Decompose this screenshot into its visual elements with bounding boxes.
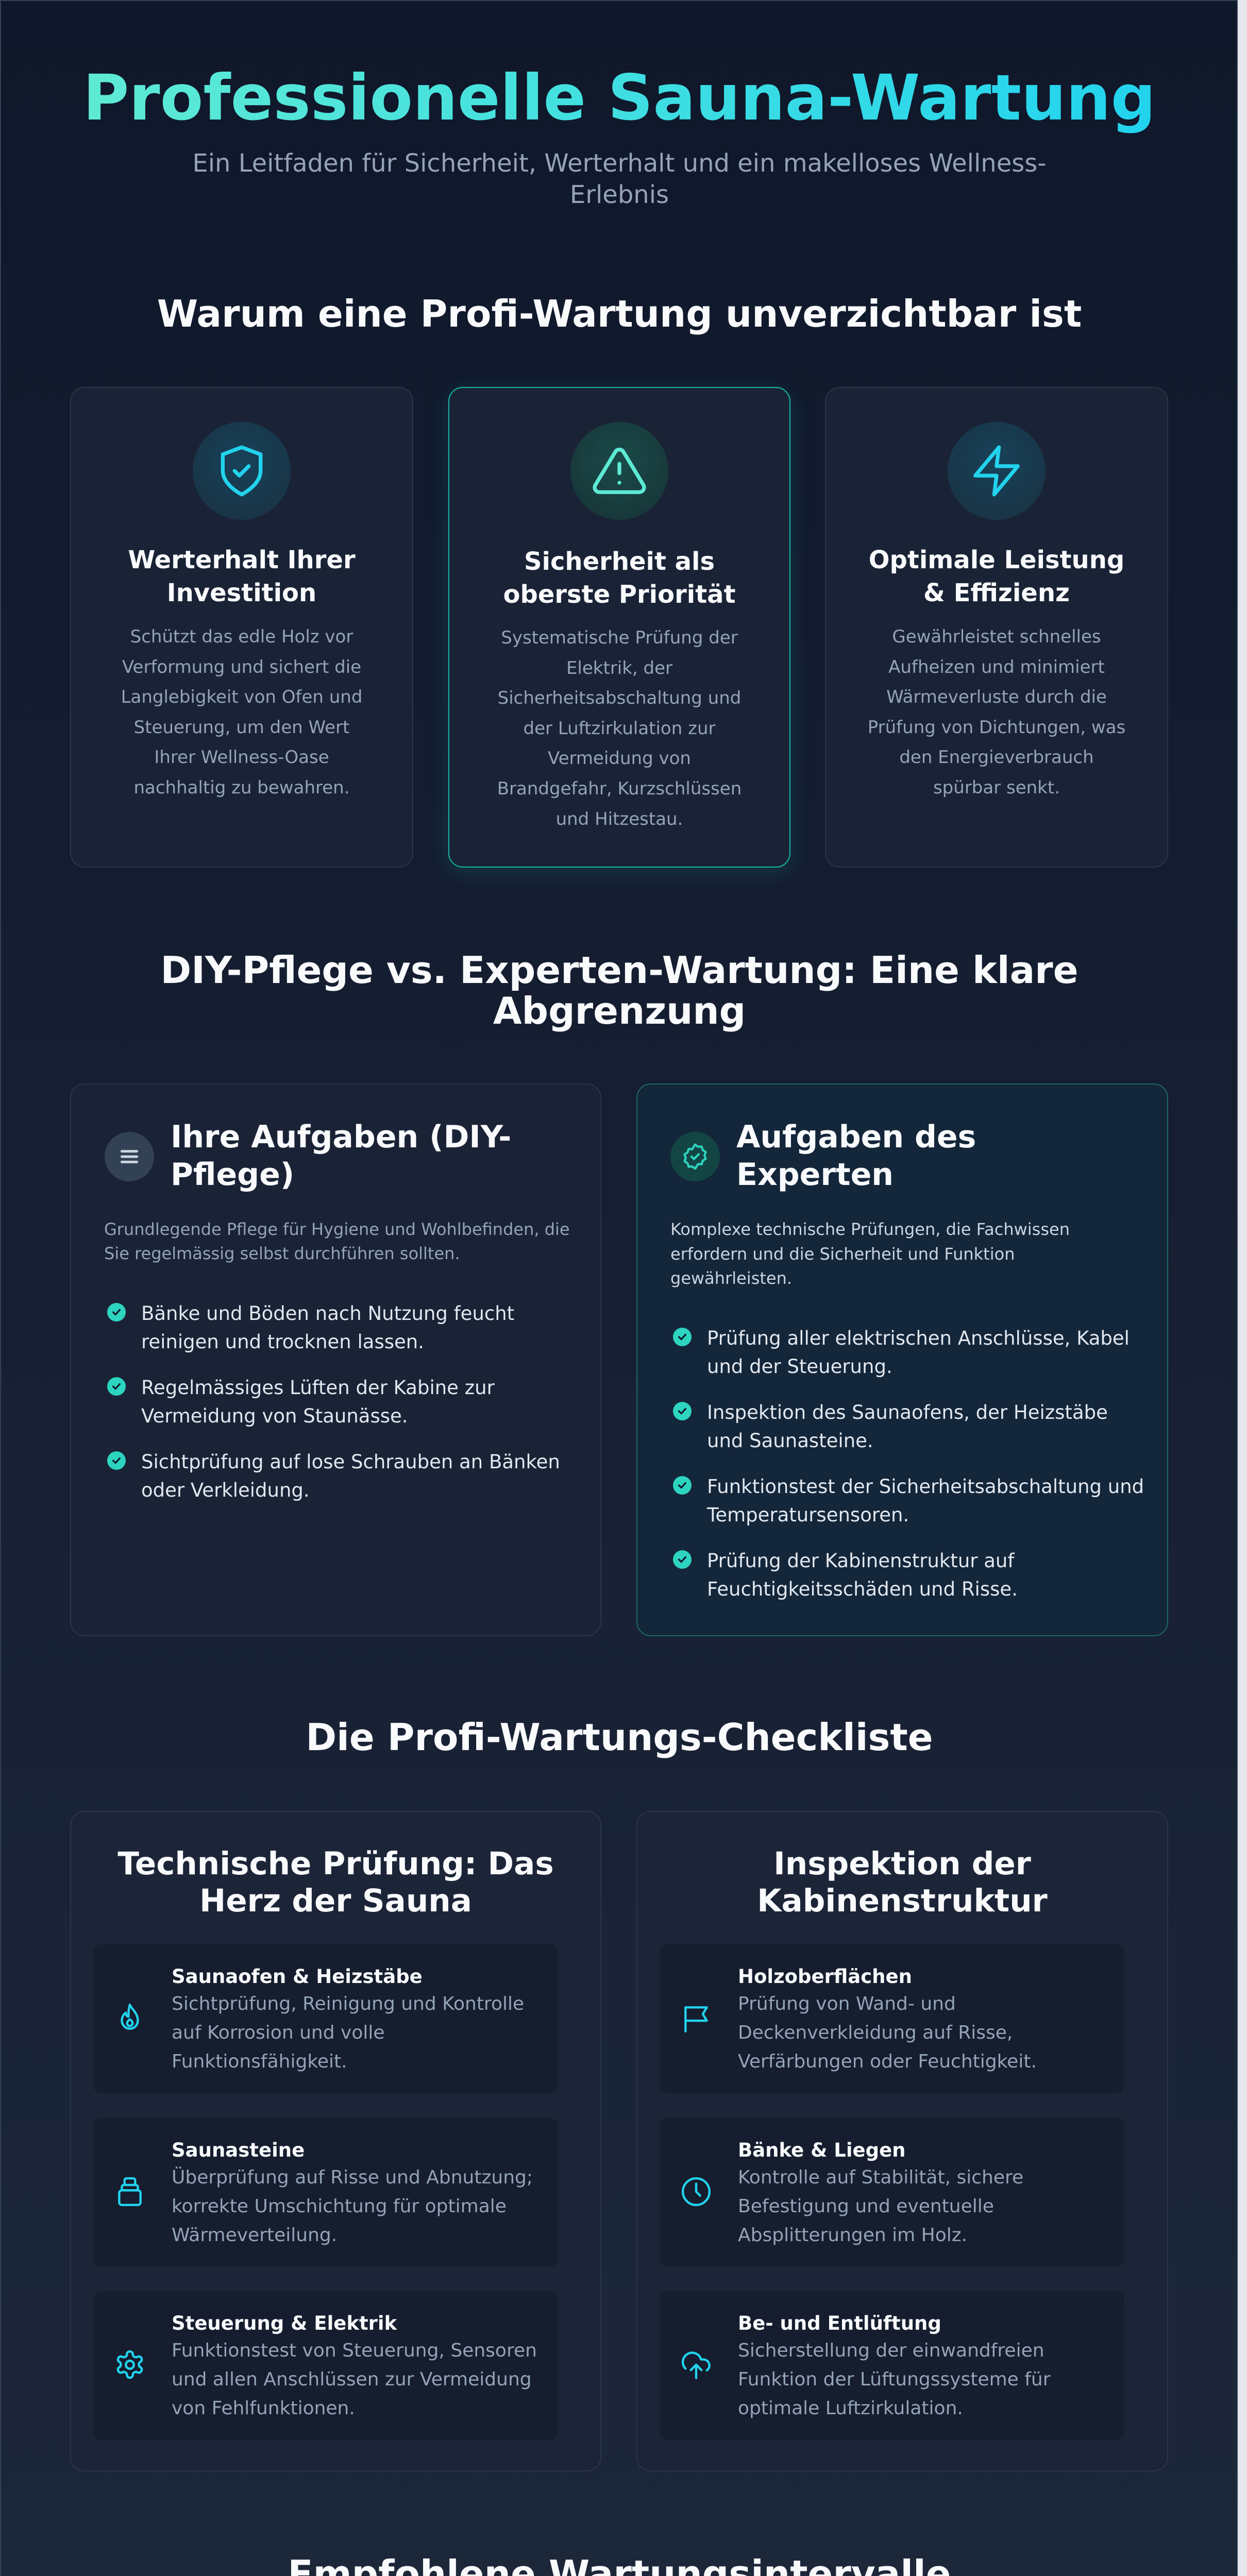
card text: den Energieverbrauch <box>899 747 1094 768</box>
heading: DIY vs Experten <box>160 948 1079 1032</box>
card title <box>128 546 356 607</box>
panel title: Experten <box>736 1157 894 1193</box>
item: Holzoberflächen: Prüfung von Wand- und <box>738 1993 956 2014</box>
card text: Systematische Prüfung der <box>501 628 738 648</box>
card text: spürbar senkt. <box>933 777 1060 798</box>
card title: & Effizienz <box>923 579 1070 607</box>
item: Bänke: Bänke & Liegen <box>738 2139 906 2161</box>
title: Professionelle Sauna-Wartung <box>83 61 1156 134</box>
item: Saunaofen: Funktionsfähigkeit. <box>172 2051 347 2072</box>
card title: Werterhalt Ihrer <box>128 546 356 574</box>
card text: Steuerung, um den Wert <box>134 717 349 738</box>
heading: why: Warum eine Profi-Wartung unverzichtbar ist <box>157 292 1082 335</box>
card text: und Hitzestau. <box>556 809 683 829</box>
panel title <box>117 1845 554 1919</box>
item: Bänke: Kontrolle auf Stabilität, sichere <box>738 2167 1023 2188</box>
card text: Sicherheitsabschaltung und <box>498 688 741 708</box>
card text: Gewährleistet schnelles <box>892 626 1101 647</box>
panel: Leistung <box>825 387 1168 868</box>
item: Saunaofen: auf Korrosion und volle <box>172 2022 384 2043</box>
panel: Werterhalt <box>70 387 413 868</box>
item: Steuerung <box>93 2291 558 2440</box>
list: oder Verkleidung. <box>141 1479 310 1501</box>
list <box>673 1327 1144 1600</box>
card text: Elektrik, der <box>566 658 672 679</box>
item: Steuerung: und allen Anschlüssen zur Vermeidung <box>172 2369 532 2390</box>
item: Lüftung <box>660 2291 1124 2440</box>
item: Holzoberflächen: Verfärbungen oder Feuchtigkeit. <box>738 2051 1037 2072</box>
item: Holzoberflächen: Deckenverkleidung auf Risse, <box>738 2022 1013 2043</box>
panel title <box>736 1119 976 1193</box>
item: Saunasteine: korrekte Umschichtung für optimale <box>172 2196 507 2217</box>
card text: Wärmeverluste durch die <box>886 687 1107 707</box>
list: Bänke und Böden nach Nutzung feucht <box>141 1302 514 1325</box>
panel: Sicherheit <box>448 387 790 868</box>
card text: nachhaltig zu bewahren. <box>133 777 350 798</box>
list: Inspektion des Saunaofens, der Heizstäbe <box>707 1401 1108 1423</box>
card title: Sicherheit als <box>524 547 715 576</box>
item: Steuerung: Funktionstest von Steuerung, Sensoren <box>172 2340 537 2361</box>
item: Saunasteine: Saunasteine <box>172 2139 305 2161</box>
item: Bänke <box>660 2118 1124 2267</box>
panel title: Herz der Sauna <box>199 1883 472 1919</box>
item: Steuerung: von Fehlfunktionen. <box>172 2398 355 2419</box>
list: Sichtprüfung auf lose Schrauben an Bänken <box>141 1451 560 1473</box>
description: gewährleisten. <box>670 1268 792 1288</box>
panel title: Pflege) <box>171 1157 294 1193</box>
card text: der Luftzirkulation zur <box>524 718 715 739</box>
description: Grundlegende Pflege für Hygiene und Wohlbefinden, die <box>104 1219 570 1239</box>
list: Temperatursensoren. <box>707 1504 909 1526</box>
description: Sie regelmässig selbst durchführen sollten. <box>104 1244 460 1263</box>
list <box>107 1302 560 1501</box>
card text: Aufheizen und minimiert <box>888 657 1105 677</box>
card text <box>497 628 742 829</box>
card text: Prüfung von Dichtungen, was <box>868 717 1125 738</box>
card text: Langlebigkeit von Ofen und <box>121 687 362 707</box>
list: Prüfung der Kabinenstruktur auf <box>707 1550 1014 1572</box>
list: Prüfung aller elektrischen Anschlüsse, Kabel <box>707 1327 1130 1349</box>
icon: warning <box>570 422 668 520</box>
icon: shield <box>193 422 291 520</box>
item: Holzoberflächen: Holzoberflächen <box>738 1965 912 1988</box>
panel: Technische Prüfung <box>70 1811 601 2471</box>
description: erfordern und die Sicherheit und Funktion <box>670 1244 1015 1263</box>
card title: Optimale Leistung <box>869 546 1124 574</box>
list: und der Steuerung. <box>707 1355 892 1378</box>
panel title: Aufgaben des <box>736 1119 976 1155</box>
item: Steuerung: Steuerung & Elektrik <box>172 2312 397 2334</box>
card title <box>503 547 736 609</box>
icon: lightning <box>948 422 1046 520</box>
item: Saunaofen <box>93 1944 558 2093</box>
item: Saunaofen: Saunaofen & Heizstäbe <box>172 1965 423 1988</box>
item: Saunasteine: Wärmeverteilung. <box>172 2225 337 2246</box>
description: Komplexe technische Prüfungen, die Fachwissen <box>670 1219 1070 1239</box>
card text <box>868 626 1125 798</box>
item: Bänke: Absplitterungen im Holz. <box>738 2225 967 2246</box>
card text: Ihrer Wellness-Oase <box>154 747 329 768</box>
list: Feuchtigkeitsschäden und Risse. <box>707 1578 1018 1600</box>
card title: Investition <box>167 579 316 607</box>
list: reinigen und trocknen lassen. <box>141 1331 424 1353</box>
panel: Experten <box>636 1083 1168 1636</box>
panel title <box>757 1845 1048 1919</box>
card title <box>869 546 1124 607</box>
panel: DIY <box>70 1083 601 1636</box>
icon: badge check <box>670 1132 720 1181</box>
card title: oberste Priorität <box>503 580 736 609</box>
card text: Schützt das edle Holz vor <box>130 626 353 647</box>
item: Saunasteine <box>93 2118 558 2267</box>
subtitle: Ein Leitfaden für Sicherheit, Werterhalt und ein makelloses Wellness- <box>192 149 1047 178</box>
panel title <box>171 1119 511 1193</box>
list: Funktionstest der Sicherheitsabschaltung und <box>707 1476 1144 1498</box>
card text: Verformung und sichert die <box>122 657 361 677</box>
list: und Saunasteine. <box>707 1430 873 1452</box>
list: Regelmässiges Lüften der Kabine zur <box>141 1377 495 1399</box>
panel title: Kabinenstruktur <box>757 1883 1048 1919</box>
item: Lüftung: optimale Luftzirkulation. <box>738 2398 963 2419</box>
description <box>670 1219 1070 1288</box>
heading: DIY vs Experten: Abgrenzung <box>493 989 746 1032</box>
card text: Vermeidung von <box>548 748 691 769</box>
card text <box>121 626 362 798</box>
item: Lüftung: Be- und Entlüftung <box>738 2312 941 2334</box>
heading: checklist: Die Profi-Wartungs-Checkliste <box>306 1716 933 1759</box>
heading: DIY vs Experten: DIY-Pflege vs. Experten-Wartung: Eine klare <box>160 948 1079 992</box>
description <box>104 1219 570 1263</box>
item: Saunasteine: Überprüfung auf Risse und Abnutzung; <box>172 2167 533 2188</box>
panel: Kabinenstruktur <box>636 1811 1168 2471</box>
icon: menu <box>105 1132 154 1181</box>
item: Lüftung: Sicherstellung der einwandfreien <box>738 2340 1044 2361</box>
panel title: Inspektion der <box>773 1845 1031 1882</box>
list: Vermeidung von Staunässe. <box>141 1405 408 1427</box>
panel title: Ihre Aufgaben (DIY- <box>171 1119 511 1155</box>
card text: Brandgefahr, Kurzschlüssen <box>497 778 742 799</box>
item: Holzoberflächen <box>660 1944 1124 2093</box>
subtitle <box>192 149 1047 209</box>
item: Saunaofen: Sichtprüfung, Reinigung und Kontrolle <box>172 1993 524 2014</box>
subtitle: Erlebnis <box>570 180 669 209</box>
panel title: Technische Prüfung: Das <box>117 1845 554 1882</box>
item: Lüftung: Funktion der Lüftungssysteme für <box>738 2369 1051 2390</box>
item: Bänke: Befestigung und eventuelle <box>738 2196 994 2217</box>
